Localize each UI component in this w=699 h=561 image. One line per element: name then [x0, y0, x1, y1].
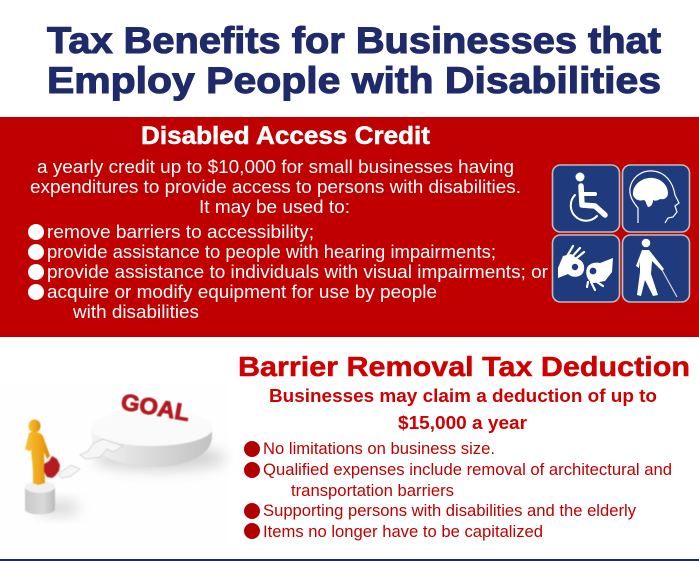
- bullet list: deduction details: [244, 439, 672, 541]
- icons: accessibility symbols: [552, 165, 690, 302]
- text block: deduction subheading: Businesses may claim a deduction of up to: [269, 386, 657, 406]
- text block: credit description: a yearly credit up to $10,000 for small businesses having: [37, 156, 514, 177]
- icon: wheelchair: [552, 165, 620, 232]
- icon: sign language hands: [552, 235, 620, 302]
- bullet list: uses of credit: [28, 221, 548, 322]
- text block: deduction subheading: [269, 386, 657, 433]
- red puzzle piece: [44, 456, 60, 478]
- bullet list: uses of credit: provide assistance to people with hearing impairments;: [47, 241, 496, 262]
- title: Tax Benefits for Businesses that: [47, 20, 661, 61]
- text block: credit description: expenditures to provide access to persons with disabilities.: [30, 176, 521, 197]
- panel: disabled access credit: [0, 117, 699, 337]
- pedestal: [25, 481, 55, 514]
- bullet list: deduction details: No limitations on business size.: [263, 439, 495, 458]
- text block: credit description: It may be used to:: [199, 196, 350, 217]
- bullet list: uses of credit: remove barriers to accessibility;: [47, 221, 314, 242]
- goal lettering: GOAL: [119, 388, 192, 426]
- title: [47, 20, 661, 101]
- puzzle bridge: [58, 439, 123, 478]
- title: Employ People with Disabilities: [47, 60, 661, 101]
- heading: disabled access credit: Disabled Access Credit: [141, 122, 431, 150]
- text block: deduction subheading: $15,000 a year: [398, 413, 527, 433]
- image: person bridging puzzle pieces to goal: [0, 385, 228, 544]
- heading: barrier removal tax deduction: Barrier Removal Tax Deduction: [238, 351, 690, 382]
- text block: credit description: [30, 156, 521, 217]
- bullet list: deduction details: Qualified expenses include removal of architectural and: [263, 460, 672, 479]
- yellow figure: [25, 420, 50, 485]
- bullet list: uses of credit: with disabilities: [72, 301, 199, 322]
- bullet list: deduction details: Items no longer have to be capitalized: [263, 522, 543, 541]
- bullet list: uses of credit: acquire or modify equipment for use by people: [47, 281, 437, 302]
- icon: person with white cane: [622, 235, 690, 302]
- bullet list: uses of credit: provide assistance to individuals with visual impairments; or: [47, 261, 548, 282]
- bullet list: deduction details: Supporting persons with disabilities and the elderly: [263, 501, 636, 520]
- goal platform: [91, 410, 213, 467]
- icon: head with brain: [622, 165, 690, 232]
- bullet list: deduction details: transportation barriers: [291, 481, 454, 500]
